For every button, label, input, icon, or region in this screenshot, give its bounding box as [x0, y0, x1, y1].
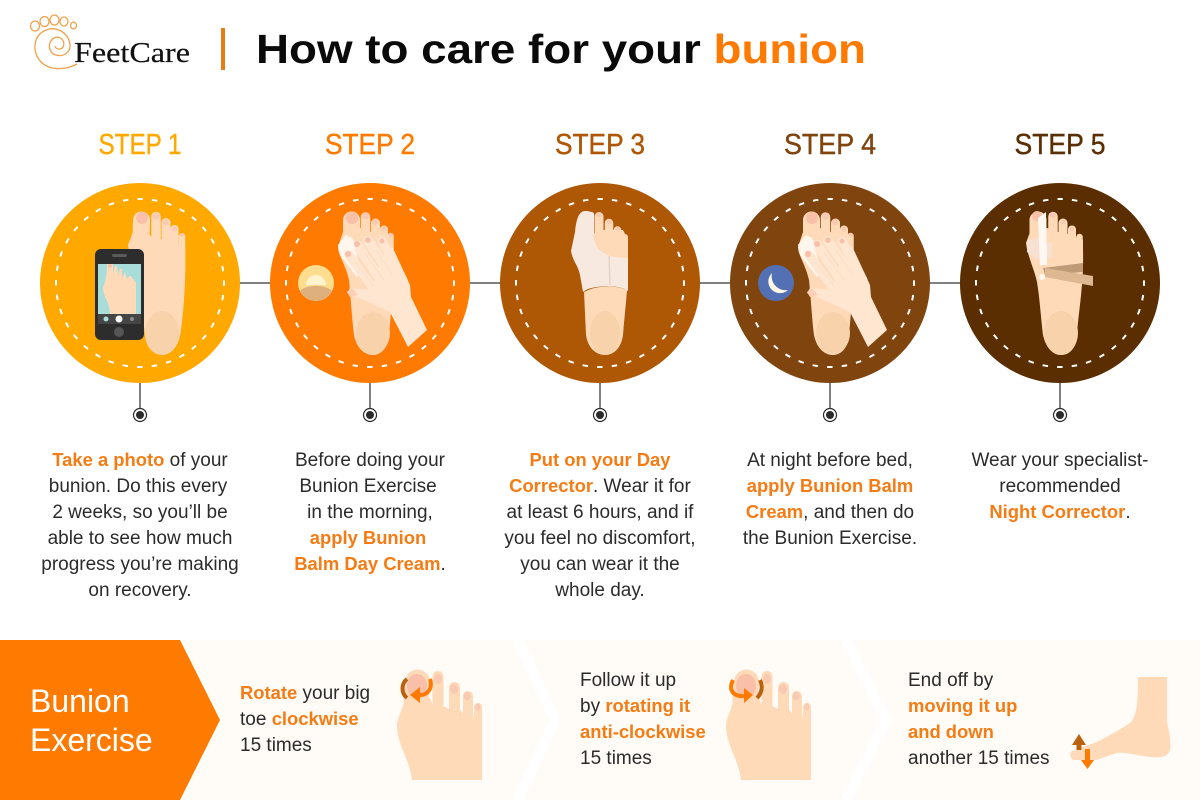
exercise 3 text: and down [908, 721, 994, 742]
step 5 text: recommended [999, 476, 1121, 497]
exercise 2 text: by rotating it [580, 695, 690, 717]
exercise 3 text: moving it up [908, 695, 1017, 716]
step 2 heading: STEP 2 [325, 129, 415, 161]
icon: foot and hand with cream [798, 212, 887, 355]
exercise 2 text: anti-clockwise [580, 721, 706, 742]
icon: sun [298, 265, 334, 301]
icon: moon [758, 265, 794, 301]
step 4 text: apply Bunion Balm [747, 475, 913, 496]
exercise 1 text: Rotate your big [240, 682, 370, 704]
exercise label: Bunion [30, 683, 130, 719]
step 4 heading: STEP 4 [784, 129, 876, 161]
step 1 text: Take a photo of your [52, 449, 228, 471]
step 4 bullet [824, 408, 836, 422]
step 1 [40, 129, 240, 601]
step 2 bullet [364, 408, 376, 422]
step 1 text: able to see how much [48, 528, 232, 549]
step 1 circle [40, 183, 240, 383]
icon: toe rotating clockwise [397, 674, 482, 780]
step 4 text: the Bunion Exercise. [743, 528, 917, 549]
logo [30, 15, 190, 69]
exercise 3 text: End off by [908, 670, 994, 691]
icon: side foot with arrows [1070, 677, 1170, 769]
step 5 text: Wear your specialist- [971, 450, 1149, 471]
exercise label: Exercise [30, 722, 153, 758]
step 2 text: Balm Day Cream. [294, 553, 446, 575]
step 4 text: Cream, and then do [746, 501, 914, 523]
step 1 heading: STEP 1 [98, 129, 182, 161]
exercise 2 text: Follow it up [580, 670, 676, 691]
icon: foot and hand with cream [338, 212, 427, 355]
exercise 1 text: 15 times [240, 735, 312, 756]
connector lines [140, 283, 1060, 408]
step 2 text: Before doing your [295, 450, 446, 471]
step 3 heading: STEP 3 [555, 129, 645, 161]
step 5 circle [960, 183, 1160, 383]
step 1 bullet [134, 408, 146, 422]
step 5 bullet [1054, 408, 1066, 422]
exercise band [0, 640, 1200, 800]
step 5 text: Night Corrector. [989, 501, 1131, 523]
step 1 text: progress you’re making [41, 554, 239, 575]
step 1 text: on recovery. [88, 580, 192, 601]
exercise 1 [240, 674, 482, 780]
title divider [221, 28, 225, 70]
step 3 text: Corrector. Wear it for [509, 475, 691, 497]
step 1 text: 2 weeks, so you’ll be [52, 502, 228, 523]
step 3 text: Put on your Day [529, 449, 671, 470]
step 4 text: At night before bed, [747, 450, 913, 471]
step 4 circle [730, 183, 930, 383]
step 1 text: bunion. Do this every [49, 476, 228, 497]
step 3 text: at least 6 hours, and if [507, 502, 694, 523]
exercise 2 text: 15 times [580, 748, 652, 769]
logo: FeetCare [74, 37, 190, 69]
exercise 3 [908, 670, 1170, 769]
step 4 [730, 129, 930, 549]
exercise 1 text: toe clockwise [240, 708, 359, 730]
exercise 2 [580, 670, 811, 780]
step 3 text: whole day. [554, 580, 645, 601]
step 3 bullet [594, 408, 606, 422]
step 3 [500, 129, 700, 601]
step 3 circle [500, 183, 700, 383]
title: How to care for your bunion [256, 26, 866, 72]
step 5 heading: STEP 5 [1014, 129, 1106, 161]
icon: foot with night corrector [1026, 211, 1093, 355]
icon: foot [128, 212, 185, 355]
icon: foot with day corrector [571, 211, 628, 355]
icon: phone [95, 249, 144, 340]
icon: toe rotating anti-clockwise [726, 674, 811, 780]
step 2 [270, 129, 470, 575]
step 3 text: you can wear it the [520, 554, 680, 575]
exercise label [0, 640, 220, 800]
step 2 circle [270, 183, 470, 383]
exercise 3 text: another 15 times [908, 748, 1050, 769]
step 2 text: apply Bunion [310, 527, 426, 548]
step 5 [960, 129, 1160, 523]
step 3 text: you feel no discomfort, [504, 528, 696, 549]
step 2 text: in the morning, [307, 502, 433, 523]
step 2 text: Bunion Exercise [299, 476, 437, 497]
